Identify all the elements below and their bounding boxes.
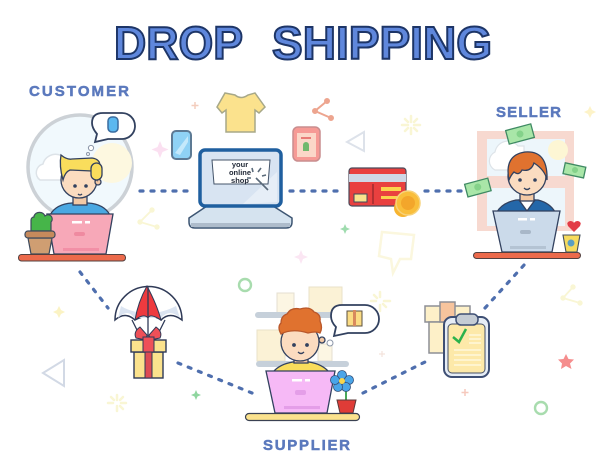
dotted connectors [80, 191, 525, 393]
icon: phone [172, 131, 191, 159]
heading: seller: SELLER [496, 104, 561, 121]
icon: thought bubble with gift [327, 305, 379, 346]
icon: book [293, 127, 320, 161]
icon: cactus [25, 212, 55, 254]
character: seller [497, 152, 555, 212]
icon: cursor [247, 168, 268, 190]
title: DROP [114, 17, 243, 69]
character: customer [50, 155, 110, 215]
laptop: pink [47, 214, 113, 254]
icon: credit card [349, 168, 420, 217]
title: SHIPPING [272, 17, 492, 69]
website text [229, 160, 251, 185]
character: supplier [273, 308, 329, 372]
icon: thought bubble with phone [86, 113, 135, 156]
panel: online shop [172, 93, 420, 228]
panel: seller [465, 124, 586, 258]
icon: t-shirt [217, 93, 265, 132]
icon: banknote left [465, 178, 491, 197]
website text: shop [231, 176, 249, 185]
window [477, 131, 574, 231]
desk [18, 254, 126, 261]
laptop: pink lilac [266, 371, 335, 413]
icon: share [313, 99, 333, 120]
decorative background icons [43, 99, 596, 414]
icon: banknote top [506, 124, 534, 144]
icon: banknote right [563, 163, 586, 178]
icon: clipboard with boxes [425, 302, 489, 377]
title [114, 17, 492, 69]
porthole background [28, 115, 132, 219]
desk [246, 414, 360, 420]
panel: customer [18, 113, 135, 261]
desk [474, 252, 580, 258]
icon: cup [563, 235, 580, 252]
panel: supplier [246, 287, 379, 420]
website text: online [229, 168, 251, 177]
icon: heart [567, 221, 581, 232]
heading: customer: CUSTOMER [29, 83, 129, 100]
icon: coins [394, 191, 420, 217]
laptop: grey blue [493, 211, 560, 252]
laptop: blue online shop [189, 150, 292, 228]
website text: your [232, 160, 248, 169]
shelves with boxes [255, 287, 349, 367]
icon: parachute gift [115, 286, 182, 378]
icon: flower pot [330, 370, 356, 413]
heading: supplier: SUPPLIER [263, 437, 350, 454]
